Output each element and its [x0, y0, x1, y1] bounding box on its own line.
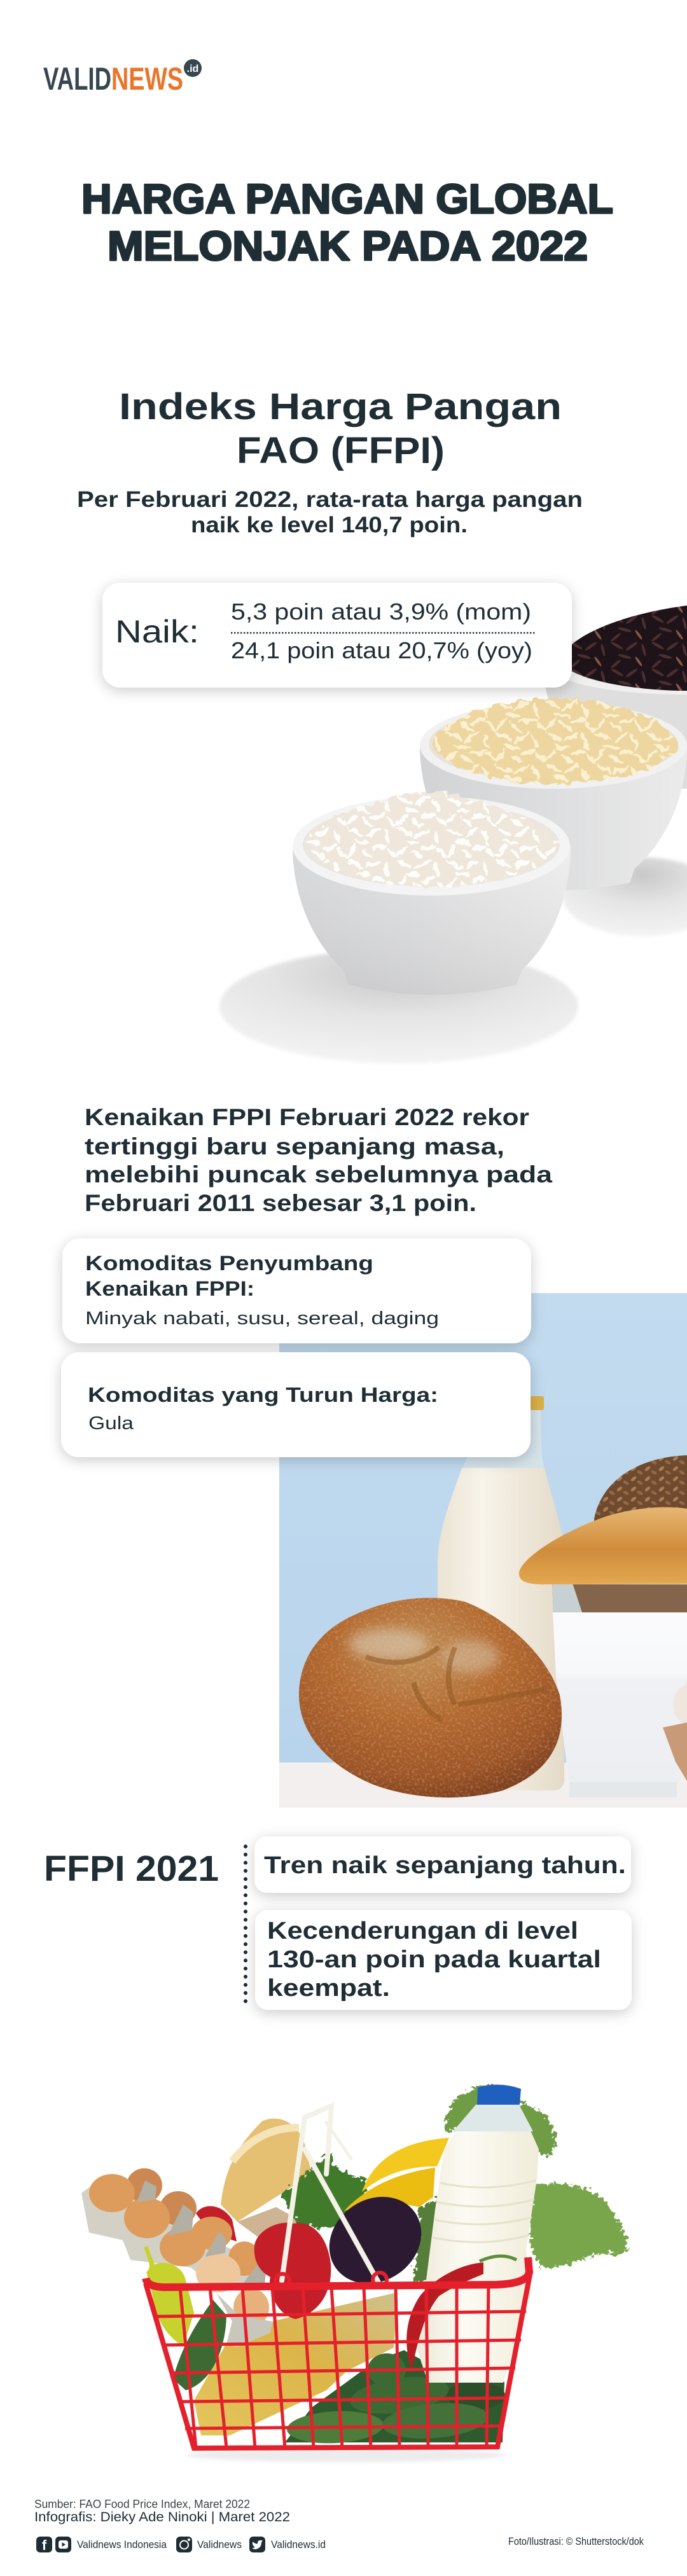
lead text: Per Februari 2022, rata-rata harga pangan — [77, 487, 583, 512]
round loaf — [299, 1598, 562, 1797]
heading: FFPI: Indeks Harga Pangan — [119, 386, 562, 427]
parsley — [282, 2153, 369, 2229]
source credits — [34, 2498, 290, 2524]
source credits: Sumber: FAO Food Price Index, Maret 2022 — [34, 2498, 250, 2510]
dotted divider — [244, 1846, 247, 2002]
card: trend: Tren naik sepanjang tahun. — [264, 1852, 626, 1879]
heading: FFPI: FAO (FFPI) — [237, 430, 445, 471]
photo: bread and milk — [279, 1293, 687, 1808]
card: fourth quarter: 130-an poin pada kuartal — [267, 1946, 601, 1973]
basket handles — [282, 2106, 380, 2285]
label: Validnews Indonesia: Validnews Indonesia — [77, 2538, 167, 2551]
back bowl with black rice — [543, 606, 687, 789]
paragraph: record: Februari 2011 sebesar 3,1 poin. — [85, 1190, 476, 1216]
photo: grocery basket — [81, 2084, 627, 2462]
card: falling commodities: Komoditas yang Turun Harga: — [88, 1383, 438, 1406]
card: fourth quarter: keempat. — [267, 1975, 390, 2002]
seeded loaf — [594, 1455, 687, 1527]
label: Validnews: Validnews — [197, 2538, 242, 2551]
card: rising commodities: Kenaikan FPPI: — [85, 1277, 254, 1300]
cucumbers — [173, 2300, 505, 2446]
red chili — [406, 2256, 517, 2371]
icon: twitter — [249, 2537, 265, 2552]
big red pepper — [254, 2223, 331, 2319]
basket shadow — [187, 2448, 505, 2462]
milk bottle — [417, 2084, 539, 2383]
title: HARGA PANGAN GLOBAL — [81, 176, 613, 222]
bread — [221, 2119, 312, 2245]
card: Naik — [102, 583, 572, 688]
egg and carton — [663, 1684, 687, 1781]
paragraph: record: tertinggi baru sepanjang masa, — [85, 1133, 504, 1160]
sky background — [279, 1293, 687, 1762]
source credits: Infografis: Dieky Ade Ninoki | Maret 2022 — [34, 2510, 290, 2524]
oil bottle — [194, 2292, 398, 2435]
milk bottle — [438, 1396, 564, 1790]
eggs — [89, 2168, 269, 2327]
bowl shadow middle — [563, 857, 687, 936]
card: Naik: Naik: — [115, 614, 199, 649]
card: falling commodities — [61, 1352, 531, 1457]
carton piece in basket — [216, 2293, 273, 2347]
card: Naik: 5,3 poin atau 3,9% (mom) — [231, 599, 531, 625]
card: rising commodities: Komoditas Penyumbang — [85, 1252, 373, 1275]
photo credit: Foto/Ilustrasi: © Shutterstock/dok — [508, 2536, 644, 2547]
title: MELONJAK PADA 2022 — [108, 223, 588, 269]
eggplant — [312, 2179, 438, 2301]
card: fourth quarter — [255, 1910, 632, 2010]
icon: instagram — [176, 2537, 192, 2552]
table — [279, 1762, 687, 1808]
egg carton — [81, 2178, 267, 2290]
bananas — [344, 2138, 449, 2211]
middle bowl with yellow rice — [420, 698, 687, 890]
logo — [43, 59, 202, 97]
title — [81, 176, 613, 269]
card: rising commodities: Minyak nabati, susu, sereal, daging — [85, 1308, 439, 1329]
red basket — [146, 2257, 530, 2448]
heading: FFPI — [119, 386, 562, 471]
paragraph: record: Kenaikan FPPI Februari 2022 rekor — [85, 1104, 529, 1130]
lead text: naik ke level 140,7 poin. — [191, 513, 468, 537]
paragraph: record — [85, 1104, 553, 1216]
yellow-green pepper — [144, 2246, 194, 2346]
logo: NEWS — [111, 61, 183, 97]
card: trend — [254, 1836, 631, 1893]
baguette — [519, 1507, 687, 1584]
lead text — [77, 487, 583, 537]
logo: .id — [187, 64, 198, 74]
front bowl with white rice — [293, 792, 571, 995]
icon: facebook: f — [42, 2537, 47, 2553]
icon: youtube — [55, 2537, 71, 2552]
icon: facebook — [36, 2537, 52, 2553]
card: rising commodities — [62, 1238, 531, 1343]
glass of milk — [552, 1582, 687, 1797]
card: fourth quarter: Kecenderungan di level — [267, 1918, 578, 1944]
label: Validnews.id: Validnews.id — [271, 2538, 326, 2551]
paragraph: record: melebihi puncak sebelumnya pada — [85, 1161, 553, 1188]
photo: rice bowls — [219, 606, 687, 1063]
card: falling commodities: Gula — [88, 1413, 134, 1434]
logo: VALID — [43, 61, 111, 97]
heading: FFPI 2021: FFPI 2021 — [44, 1848, 219, 1889]
kale — [413, 2085, 627, 2283]
card: Naik: 24,1 poin atau 20,7% (yoy) — [231, 637, 532, 663]
social media row — [36, 2537, 326, 2553]
small red pepper — [196, 2206, 237, 2241]
bowl shadow front — [219, 949, 578, 1063]
